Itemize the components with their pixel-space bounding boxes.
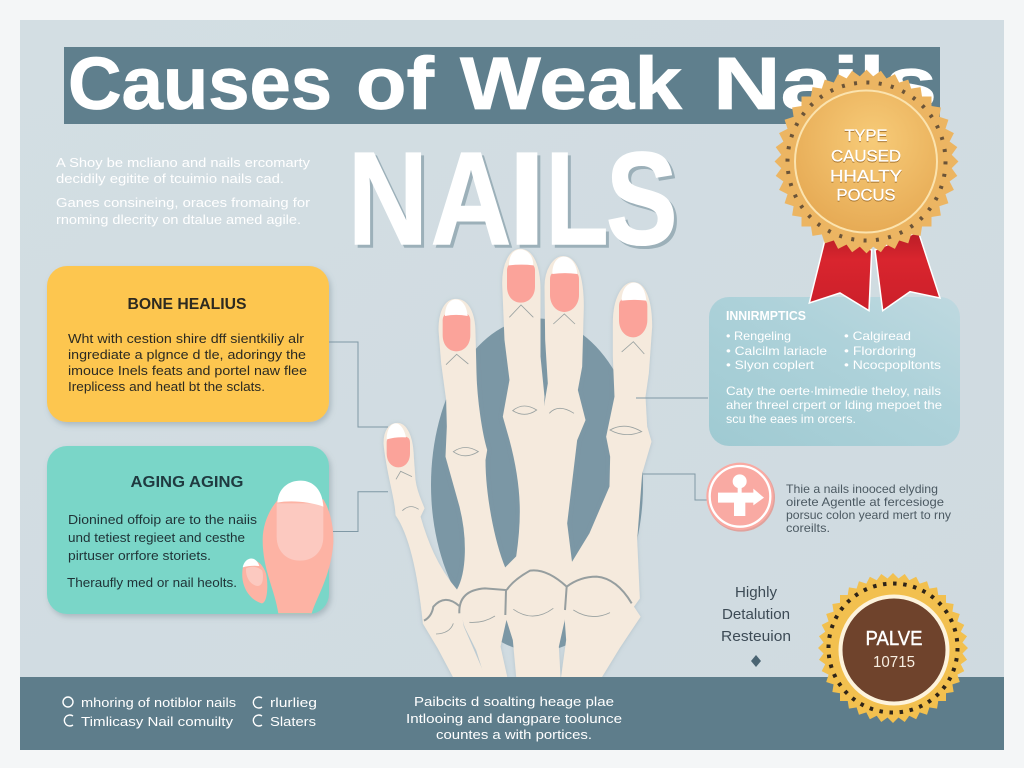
seal text: TYPE bbox=[844, 126, 888, 145]
symptom list bbox=[726, 329, 941, 372]
footer note: Intlooing and dangpare toolunce bbox=[406, 712, 622, 726]
title text: Causes bbox=[68, 42, 332, 125]
side label: Highly bbox=[735, 585, 778, 601]
large NAILS heading bbox=[348, 125, 678, 272]
callout text bbox=[786, 482, 951, 535]
card text: imouce Inels feats and portel naw flee bbox=[68, 364, 307, 378]
diamond marker bbox=[751, 655, 761, 667]
intro text: rnoming dlecrity on dtalue amed agile. bbox=[56, 213, 301, 227]
title banner bbox=[64, 42, 940, 125]
card: bone health bbox=[47, 266, 329, 422]
brown seal bbox=[818, 573, 968, 723]
card heading: AGING AGING bbox=[130, 474, 244, 491]
callout text: Thie a nails inooced elyding bbox=[786, 482, 938, 496]
side label: Resteuion bbox=[721, 629, 791, 645]
large NAILS heading: A bbox=[431, 125, 511, 272]
starburst bbox=[818, 573, 968, 723]
large NAILS heading: I bbox=[508, 125, 546, 272]
footer bullet list: Slaters bbox=[270, 715, 316, 729]
card text: Ireplicess and heatl bt the sclats. bbox=[68, 380, 265, 394]
card text: Wht with cestion shire dff sientkiliy alr bbox=[68, 332, 304, 346]
nail plates bbox=[387, 249, 647, 467]
callout text: coreilts. bbox=[786, 521, 830, 535]
seal text: HHALTY bbox=[830, 166, 902, 186]
side label bbox=[721, 585, 791, 645]
starburst bbox=[775, 70, 958, 253]
card: symptoms list bbox=[709, 297, 960, 446]
intro text bbox=[56, 156, 311, 227]
seal text bbox=[830, 126, 902, 204]
footer note bbox=[406, 695, 622, 742]
card text: aher threel crpert or lding mepoet the bbox=[726, 398, 942, 412]
gold seal with red ribbons bbox=[775, 70, 958, 311]
symptom list: • Slyon coplert bbox=[726, 358, 815, 372]
card text: ingrediate a plgnce d tle, adoringy the bbox=[68, 348, 306, 362]
connector lines bbox=[329, 342, 708, 532]
intro text: A Shoy be mcliano and nails ercomarty bbox=[56, 156, 311, 170]
seal text: CAUSED bbox=[831, 146, 901, 166]
card text: Theraufly med or nail heolts. bbox=[67, 576, 237, 590]
hand skeleton illustration bbox=[384, 249, 652, 677]
footer note: countes a with portices. bbox=[436, 728, 592, 742]
seal text: PALVE bbox=[866, 628, 922, 650]
icon: finger with nail bbox=[242, 481, 333, 613]
large NAILS heading: N bbox=[348, 125, 428, 272]
large NAILS heading: S bbox=[606, 125, 678, 272]
side label: Detalution bbox=[722, 607, 790, 623]
card heading: BONE HEALIUS bbox=[128, 296, 247, 313]
callout text: oirete Agentle at fercesioge bbox=[786, 495, 944, 509]
intro text: Ganes consineing, oraces fromaing for bbox=[56, 196, 310, 210]
finger bones bbox=[384, 249, 652, 677]
card text bbox=[726, 384, 942, 426]
symptom list: • Rengeling bbox=[726, 329, 791, 343]
symptom list: • Flordoring bbox=[844, 344, 916, 358]
star ring bbox=[828, 584, 958, 712]
title text: of bbox=[356, 42, 434, 125]
card text: pirtuser orrfore storiets. bbox=[68, 549, 211, 563]
footer note: Paibcits d soalting heage plae bbox=[414, 695, 614, 709]
card text bbox=[67, 513, 257, 590]
footer bullet list: mhoring of notiblor nails bbox=[81, 696, 236, 710]
title text bbox=[68, 42, 937, 125]
card text: scu the eaes im orcers. bbox=[726, 412, 856, 426]
card text bbox=[68, 332, 307, 394]
seal text: POCUS bbox=[836, 186, 896, 204]
footer bullet list bbox=[63, 696, 317, 729]
seal number: 10715 bbox=[873, 654, 915, 671]
card text: Dionined offoip are to the naiis bbox=[68, 513, 257, 527]
ribbons bbox=[809, 232, 940, 311]
seal face bbox=[840, 596, 948, 704]
symptom list: • Ncocpopltonts bbox=[844, 358, 941, 372]
title text: Weak bbox=[460, 42, 683, 125]
large NAILS heading: L bbox=[546, 125, 608, 272]
icon: pink direction sign bbox=[706, 463, 775, 532]
intro text: decidily egitite of tcuimio nails cad. bbox=[56, 172, 284, 186]
star ring bbox=[788, 82, 946, 240]
footer bullet list: rlurlieg bbox=[270, 696, 317, 710]
card text: und tetiest regieet and cesthe bbox=[68, 531, 245, 545]
title text: Nails bbox=[713, 42, 937, 125]
symptom list: • Calcilm lariacle bbox=[726, 344, 827, 358]
joint and knuckle lines bbox=[396, 305, 644, 634]
backdrop oval bbox=[431, 318, 643, 652]
callout text: porsuc colon yeard mert to rny bbox=[786, 508, 951, 522]
card text: Caty the oerte·lmimedie theloy, nails bbox=[726, 384, 941, 398]
footer band bbox=[20, 677, 1004, 750]
card: aging bbox=[47, 446, 333, 614]
medal face bbox=[795, 90, 937, 232]
symptom list: • Calgiread bbox=[844, 329, 911, 343]
footer bullet list: Timlicasy Nail comuilty bbox=[81, 715, 234, 729]
card heading: INNIRMPTICS bbox=[726, 309, 806, 323]
